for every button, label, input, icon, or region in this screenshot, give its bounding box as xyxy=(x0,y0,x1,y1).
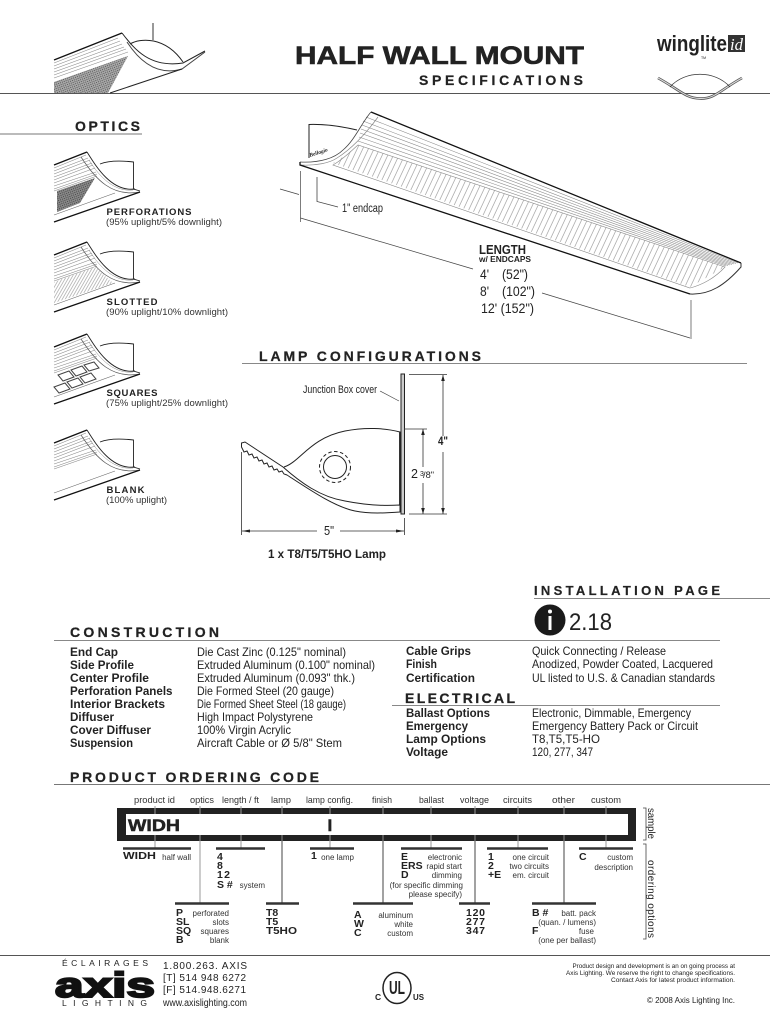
options: finish: white xyxy=(393,920,414,929)
table: construction values: Extruded Aluminum (0.100" nominal) xyxy=(197,658,375,672)
heading: optics: OPTICS xyxy=(75,118,140,134)
title: HALF WALL MOUNT xyxy=(295,42,584,70)
text: length table: (102") xyxy=(502,283,535,299)
table: construction values: Die Formed Sheet Steel (18 gauge) xyxy=(197,697,346,711)
table: electrical: T8,T5,T5-HO xyxy=(532,732,600,746)
table: electrical: Electronic, Dimmable, Emergency xyxy=(532,706,691,720)
options: other xyxy=(532,907,597,945)
options: circuits: 2 xyxy=(488,860,494,872)
optic option: slotted xyxy=(54,242,228,318)
dimensions: lamp section: 5" xyxy=(324,524,334,538)
optic option: squares: SQUARES xyxy=(106,388,158,399)
legal note: Contact Axis for latest product information. xyxy=(611,977,735,984)
logo: winglite id: id xyxy=(730,35,743,54)
options: optics: B xyxy=(176,934,184,946)
options: optics: perforated xyxy=(193,909,229,918)
table: finish and certification: Finish xyxy=(406,657,437,671)
legal note: Product design and development is an on going process at xyxy=(572,963,735,970)
optic option: slotted: (90% uplight/10% downlight) xyxy=(106,307,228,318)
ordering code column labels: voltage xyxy=(460,795,489,805)
optic option: blank xyxy=(54,430,167,506)
table: electrical: 120, 277, 347 xyxy=(532,745,593,759)
options: ballast: please specify) xyxy=(409,890,462,899)
options: ballast: D xyxy=(401,869,409,881)
sample code frame xyxy=(117,808,636,841)
top rule xyxy=(0,92,770,94)
table: electrical xyxy=(406,706,699,759)
ordering code column labels: optics xyxy=(190,795,215,805)
text: length table: 12' (152") xyxy=(481,300,534,316)
table: finish and certification: Anodized, Powder Coated, Lacquered xyxy=(532,657,713,671)
diagram: lamp cross section: Junction Box cover xyxy=(303,384,377,396)
table: construction labels: Interior Brackets xyxy=(70,697,165,711)
table: construction labels: Perforation Panels xyxy=(70,684,173,698)
bottom rule xyxy=(0,954,770,956)
table: electrical: Emergency xyxy=(406,719,468,733)
options: product id xyxy=(123,850,191,862)
table: construction labels: End Cap xyxy=(70,645,118,659)
icon: UL certification mark: C xyxy=(375,992,381,1002)
options: other: F xyxy=(532,925,539,937)
options: voltage: 277 xyxy=(466,916,485,928)
options: optics: SL xyxy=(176,916,190,928)
connector lines xyxy=(155,806,606,903)
optic option: slotted: SLOTTED xyxy=(106,297,158,308)
optic option: perforations: PERFORATIONS xyxy=(106,207,192,218)
options: finish: C xyxy=(354,927,362,939)
options: custom: C xyxy=(579,851,587,863)
logo: axis lighting: ÉCLAIRAGES xyxy=(62,958,148,968)
table: electrical: Emergency Battery Pack or Circuit xyxy=(532,719,699,733)
text: length table: (52") xyxy=(502,266,528,282)
logo: axis lighting: axis xyxy=(55,966,155,1005)
table: finish and certification xyxy=(406,644,715,685)
options: lamp: T8 xyxy=(266,907,278,919)
table: construction values xyxy=(197,645,375,750)
options: optics: SQ xyxy=(176,925,191,937)
dimension: endcap: 1" endcap xyxy=(342,203,383,215)
optic option: perforations: (95% uplight/5% downlight) xyxy=(106,217,222,228)
options: finish: A xyxy=(354,909,362,921)
subtitle: SPECIFICATIONS xyxy=(419,72,583,88)
ordering code column labels: product id xyxy=(134,795,175,805)
icon: winglite profile xyxy=(658,74,742,99)
lamp caption: 1 x T8/T5/T5HO Lamp xyxy=(268,549,386,561)
options: custom: description xyxy=(594,863,633,872)
sample code frame: WIDH xyxy=(128,816,180,835)
options: product id: half wall xyxy=(162,853,191,862)
optic option: blank: (100% uplight) xyxy=(106,495,167,506)
illustration: main luminaire: Bellagio xyxy=(308,147,329,159)
ordering code column labels: lamp config. xyxy=(306,795,353,805)
side label: ordering options: ordering options xyxy=(645,860,656,938)
options: length: system xyxy=(240,881,265,890)
table: construction values: Extruded Aluminum (0.093" thk.) xyxy=(197,671,355,685)
optic option: squares: (75% uplight/25% downlight) xyxy=(106,398,228,409)
table: electrical: Lamp Options xyxy=(406,732,486,746)
ordering code column labels: finish xyxy=(372,795,392,805)
options: optics xyxy=(176,907,230,946)
table: finish and certification: UL listed to U.S. & Canadian standards xyxy=(532,671,715,685)
options: custom xyxy=(579,851,633,872)
ordering code column labels xyxy=(134,795,621,805)
ordering code column labels: length / ft xyxy=(222,795,259,805)
table: electrical: Voltage xyxy=(406,745,448,759)
optic option: perforations xyxy=(54,152,222,228)
options: length: S # xyxy=(217,879,233,891)
options: length: 12 xyxy=(217,869,230,881)
contact details: 1.800.263. AXIS xyxy=(163,961,247,972)
options: voltage xyxy=(466,907,485,937)
options: ballast: E xyxy=(401,851,408,863)
contact details: www.axislighting.com xyxy=(162,998,247,1009)
options: ballast xyxy=(390,851,463,899)
options: lamp config: 1 xyxy=(311,850,317,862)
table: construction labels: Center Profile xyxy=(70,671,149,685)
options: custom: custom xyxy=(607,853,633,862)
icon: info page number: 2.18 xyxy=(569,609,612,636)
logo: winglite id: TM xyxy=(701,56,706,60)
table: finish and certification: Certification xyxy=(406,671,475,685)
dimension: length lines xyxy=(280,171,691,339)
options: circuits xyxy=(488,851,550,881)
dimensions: lamp section xyxy=(242,374,448,538)
ordering code column labels: lamp xyxy=(271,795,291,805)
dimensions: lamp section: 4" xyxy=(438,436,448,448)
options: ballast: rapid start xyxy=(426,862,463,871)
illustration: top-left luminaire end xyxy=(54,23,205,93)
side label: ordering options xyxy=(643,844,656,939)
dimensions: lamp section: 3 xyxy=(420,471,424,478)
options: circuits: 1 xyxy=(488,851,494,863)
legal note xyxy=(566,963,735,984)
options: finish: aluminum xyxy=(378,911,413,920)
options: lamp xyxy=(266,907,297,937)
contact details: [T] 514 948 6272 xyxy=(163,973,246,984)
side label: sample: sample xyxy=(645,808,656,839)
options: other: B # xyxy=(532,907,548,919)
logo: winglite id: winglite xyxy=(656,31,727,56)
options: other: (one per ballast) xyxy=(538,936,596,945)
legal note: Axis Lighting. We reserve the right to change specifications. xyxy=(566,970,735,977)
table: electrical: Ballast Options xyxy=(406,706,490,720)
text: length table: LENGTH xyxy=(479,243,526,257)
copyright: © 2008 Axis Lighting Inc. xyxy=(647,995,735,1005)
options: length: 8 xyxy=(217,860,223,872)
options: lamp config xyxy=(311,850,355,862)
ordering code column labels: other xyxy=(552,795,575,805)
ordering code column labels: ballast xyxy=(419,795,444,805)
dimension: endcap xyxy=(317,177,383,215)
icon: UL certification mark: US xyxy=(413,992,424,1002)
table: construction labels: Diffuser xyxy=(70,710,114,724)
heading: product ordering code: PRODUCT ORDERING CODE xyxy=(70,769,319,785)
options: ballast: (for specific dimming xyxy=(390,881,463,890)
optic option: blank: BLANK xyxy=(106,485,145,496)
contact details xyxy=(162,961,247,1009)
options: circuits: +E xyxy=(488,869,501,881)
table: construction labels: Suspension xyxy=(70,736,133,750)
icon: UL certification mark: UL xyxy=(389,978,405,998)
heading: installation page: INSTALLATION PAGE xyxy=(534,583,720,598)
dimensions: lamp section: /8" xyxy=(423,470,434,481)
heading: lamp configurations: LAMP CONFIGURATIONS xyxy=(259,348,481,364)
options: circuits: two circuits xyxy=(509,862,549,871)
options: lamp config: one lamp xyxy=(321,853,355,862)
table: construction values: Die Cast Zinc (0.125" nominal) xyxy=(197,645,346,659)
table: finish and certification: Cable Grips xyxy=(406,644,471,658)
options: ballast: dimming xyxy=(432,871,462,880)
table: finish and certification: Quick Connecting / Release xyxy=(532,644,666,658)
options: optics: slots xyxy=(213,918,229,927)
ordering code column labels: custom xyxy=(591,795,621,805)
options: ballast: ERS xyxy=(401,860,423,872)
options: lamp: T5HO xyxy=(266,925,297,937)
table: construction values: 100% Virgin Acrylic xyxy=(197,723,291,737)
optic option: squares xyxy=(54,334,228,409)
table: construction values: Aircraft Cable or Ø 5/8" Stem xyxy=(197,736,342,750)
options: optics: blank xyxy=(210,936,230,945)
options: product id: WIDH xyxy=(123,850,156,862)
table: construction labels: Side Profile xyxy=(70,658,134,672)
illustration: main luminaire xyxy=(300,112,741,294)
sample code frame: I xyxy=(328,816,332,835)
options: voltage: 120 xyxy=(466,907,485,919)
options: lamp: T5 xyxy=(266,916,278,928)
options: other: batt. pack xyxy=(561,909,597,918)
options: circuits: em. circuit xyxy=(513,871,550,880)
options: optics: squares xyxy=(201,927,229,936)
table: construction values: Die Formed Steel (20 gauge) xyxy=(197,684,334,698)
dimensions: lamp section: 2 xyxy=(411,467,418,481)
table: construction values: High Impact Polystyrene xyxy=(197,710,313,724)
table: construction labels: Cover Diffuser xyxy=(70,723,151,737)
text: length table: 4' xyxy=(480,266,489,282)
table: construction labels xyxy=(70,645,173,750)
logo: axis lighting: LIGHTING xyxy=(62,998,147,1008)
text: length table: 8' xyxy=(480,283,489,299)
options: length: 4 xyxy=(217,851,223,863)
options: finish: custom xyxy=(387,929,413,938)
options: other: fuse xyxy=(579,927,595,936)
options: length xyxy=(217,851,265,891)
heading: construction: CONSTRUCTION xyxy=(70,624,219,640)
icon: UL certification mark xyxy=(375,972,424,1004)
ordering code column labels: circuits xyxy=(503,795,533,805)
options: optics: P xyxy=(176,907,183,919)
options: finish: W xyxy=(354,918,364,930)
contact details: [F] 514.948.6271 xyxy=(163,985,246,996)
text: length table: w/ ENDCAPS xyxy=(478,254,531,264)
icon: info page number xyxy=(534,604,612,636)
text: length table xyxy=(478,243,535,316)
heading: electrical: ELECTRICAL xyxy=(405,690,515,706)
option bars xyxy=(123,848,633,904)
options: other: (quan. / lumens) xyxy=(538,918,596,927)
options: finish xyxy=(354,909,414,939)
logo: axis lighting xyxy=(55,958,155,1008)
options: ballast: electronic xyxy=(428,853,462,862)
options: voltage: 347 xyxy=(466,925,485,937)
options: circuits: one circuit xyxy=(513,853,550,862)
diagram: lamp cross section xyxy=(242,374,404,514)
